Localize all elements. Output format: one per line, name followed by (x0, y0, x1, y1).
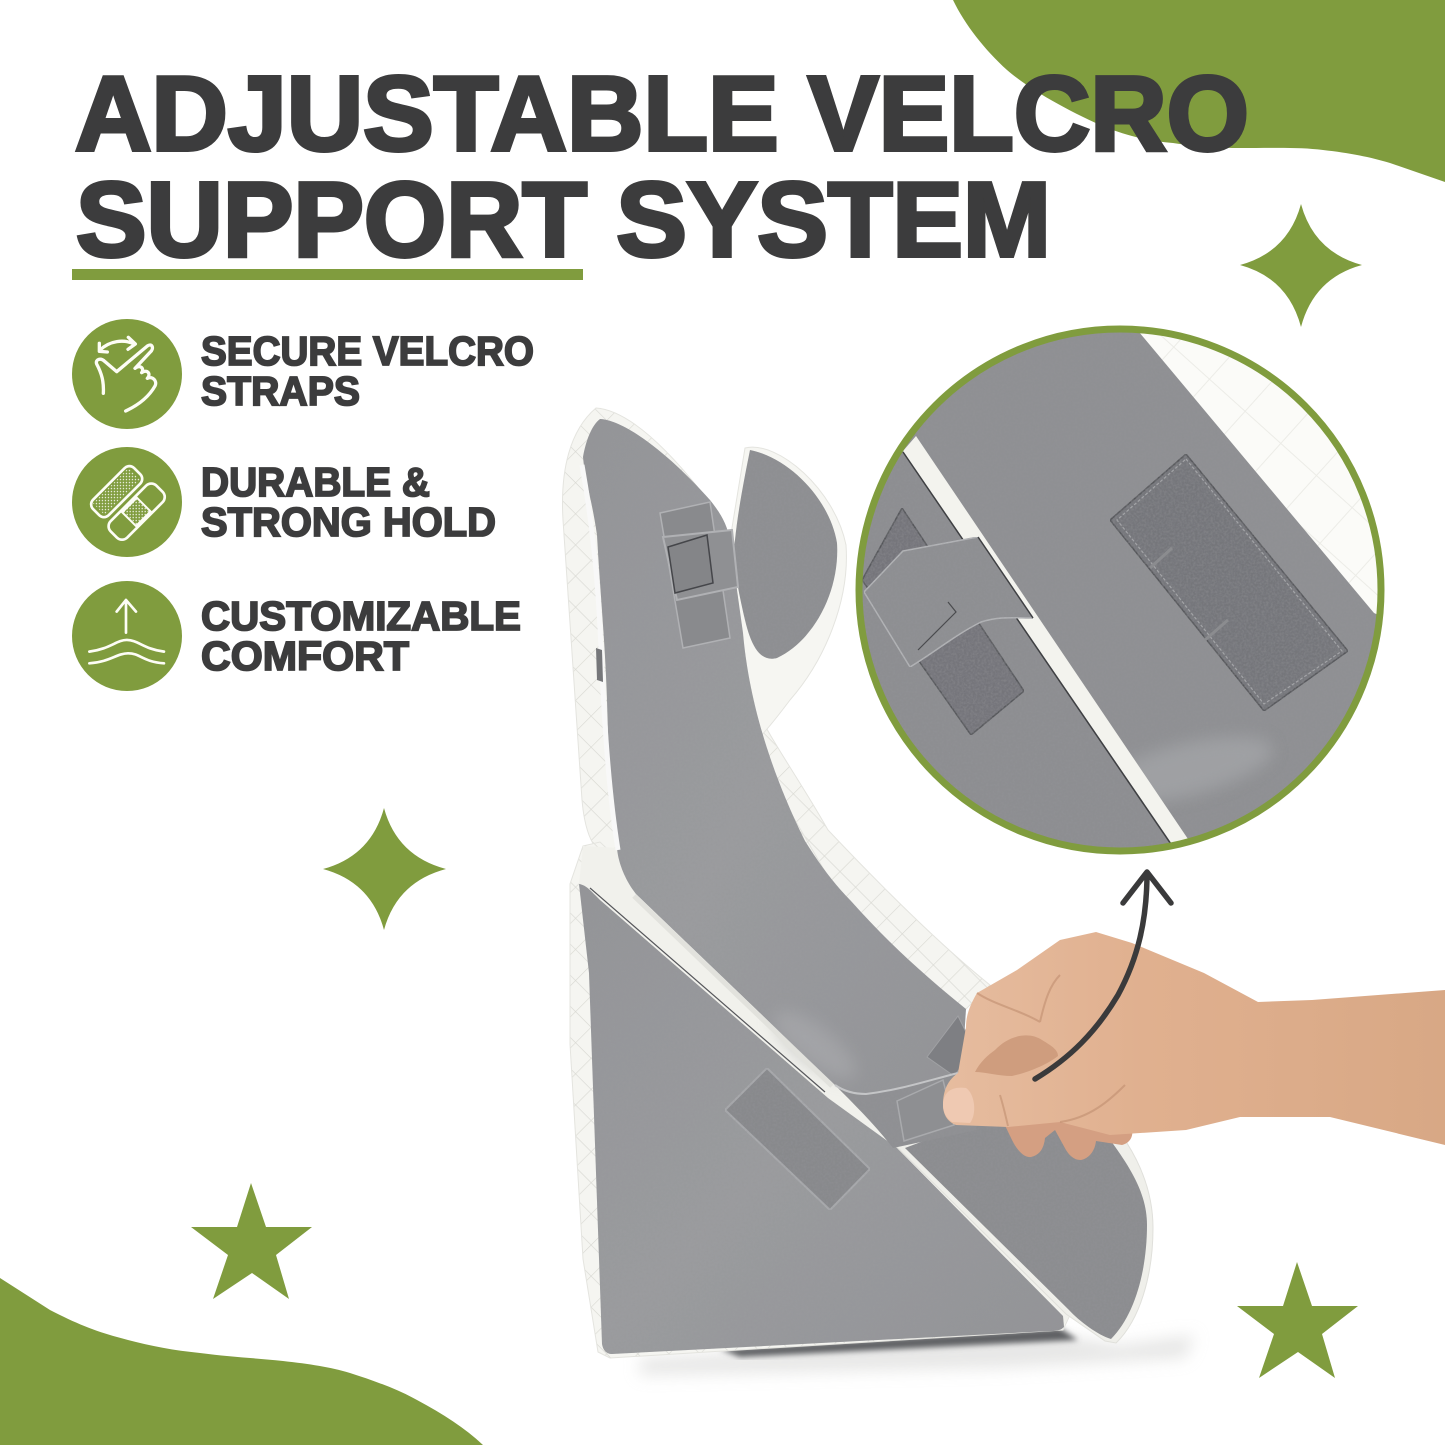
icon: hand pressing strap (72, 319, 182, 429)
feature: durable and strong hold (72, 447, 496, 557)
zoom large velcro patch (1110, 454, 1348, 711)
zoom quilted cushion (1140, 333, 1378, 614)
five point star: lower right (1237, 1262, 1358, 1378)
pulled strap (835, 1016, 977, 1148)
zoom white seam (903, 436, 1190, 850)
title underline (72, 269, 583, 280)
five point star: lower left (191, 1183, 312, 1299)
shadow between index finger and thumb (975, 1035, 1058, 1076)
feature label: STRONG HOLD (201, 499, 496, 545)
upper fabric highlight (765, 1000, 865, 1090)
product: wedge pillow system (562, 408, 1445, 1375)
upper wedge white edge (562, 408, 830, 880)
title: ADJUSTABLE VELCRO (75, 55, 1249, 173)
sparkle star: upper right (1240, 204, 1362, 327)
zoom small velcro patch (862, 508, 1024, 735)
feature label (201, 459, 496, 545)
icon: bandages (72, 447, 182, 557)
feature: secure velcro straps (72, 319, 534, 429)
feature label: SECURE VELCRO (201, 328, 534, 374)
zoom circle border (859, 329, 1381, 851)
floor shadow (640, 1335, 1195, 1375)
back panel quilted (752, 700, 990, 1015)
palm and forearm (943, 932, 1445, 1145)
feature label: CUSTOMIZABLE (201, 593, 521, 639)
curved flap (896, 1110, 1153, 1343)
sparkle star: middle left (323, 808, 446, 930)
upper wedge gray face (583, 419, 966, 1102)
green blob: top right (953, 0, 1445, 182)
zoom fabric highlight (1135, 737, 1269, 800)
thumbnail (943, 1088, 974, 1123)
zoom strap loop (864, 537, 1033, 667)
feature label (201, 593, 521, 679)
green blob: bottom left (0, 1278, 483, 1445)
hand and arm (943, 932, 1445, 1160)
upper velcro patch and loop (660, 502, 738, 648)
zoom seam shadow (903, 452, 1175, 850)
feature label: STRAPS (201, 368, 360, 414)
lower velcro patch (725, 1068, 870, 1210)
zoom circle: velcro detail (850, 320, 1400, 860)
feature: customizable comfort (72, 581, 521, 691)
lower wedge body (570, 842, 1070, 1358)
finger creases (977, 975, 1125, 1126)
icon: up arrow over waves (72, 581, 182, 691)
zoom lower fabric (1098, 766, 1142, 806)
curled fingers below thumb (1000, 1115, 1132, 1160)
white seam between wedges (634, 896, 832, 1086)
zipper (582, 465, 618, 850)
curved arrow (1035, 872, 1171, 1079)
title (75, 55, 1249, 279)
under wedge dark gap (720, 1328, 1078, 1357)
wing pillow (730, 447, 846, 740)
zoom fabric base (902, 332, 1376, 842)
feature label: DURABLE & (201, 459, 430, 505)
feature label (201, 328, 534, 414)
title: SUPPORT SYSTEM (76, 161, 1051, 279)
feature label: COMFORT (201, 633, 409, 679)
